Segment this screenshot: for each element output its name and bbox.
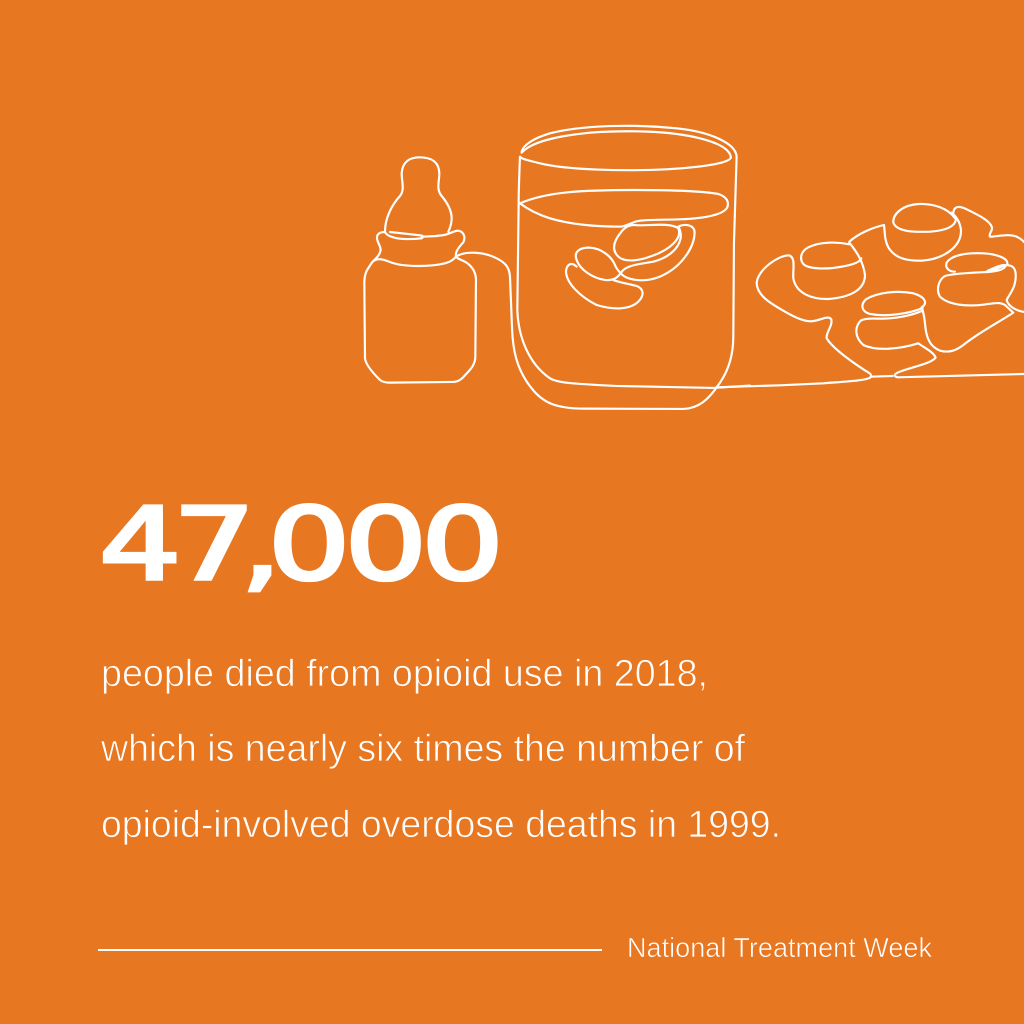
icon: dropper bottle <box>364 157 476 383</box>
icon: blister pack <box>717 204 1024 387</box>
body line 3: opioid-involved overdose deaths in 1999. <box>101 804 781 846</box>
icon: pills in the glass <box>566 225 695 308</box>
headline statistic: 47,000 <box>99 487 504 603</box>
body line 2: which is nearly six times the number of <box>100 728 745 770</box>
footer rule <box>98 949 602 951</box>
icon: glass with pills and connecting line <box>456 126 750 409</box>
body line 1: people died from opioid use in 2018, <box>101 653 708 695</box>
illustration: medicine line drawing <box>364 126 1024 409</box>
body text <box>100 653 781 846</box>
footer label: National Treatment Week <box>627 932 933 963</box>
